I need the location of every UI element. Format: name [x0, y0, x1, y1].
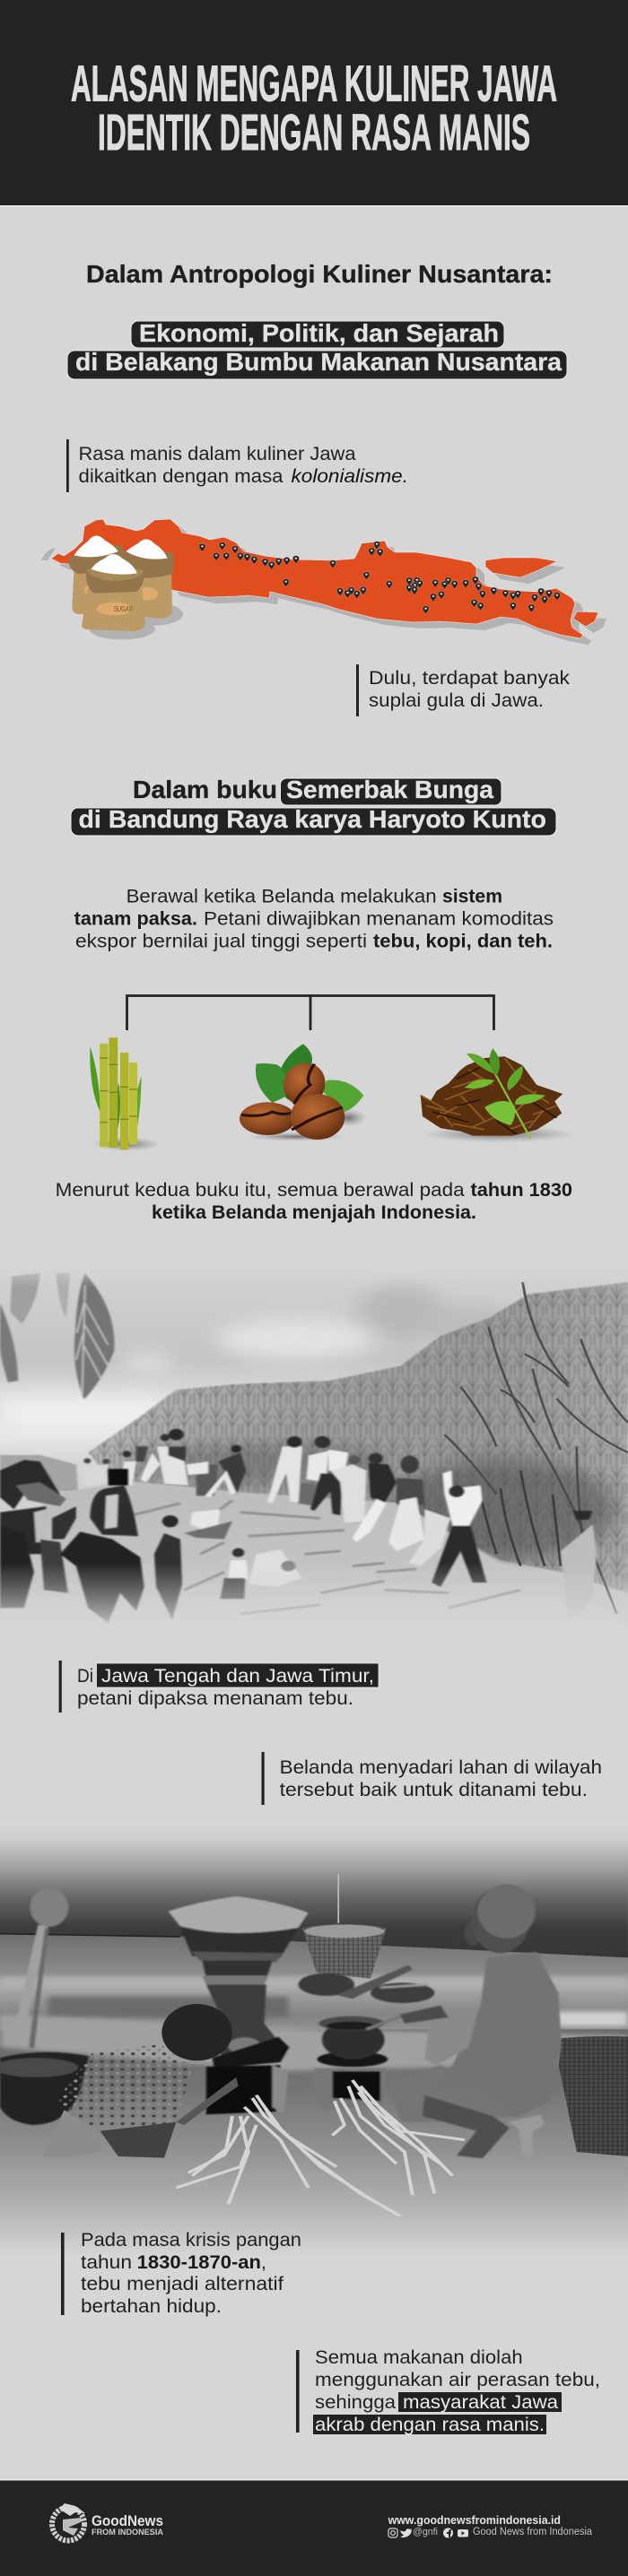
callout: lahan: tersebut baik untuk ditanami tebu.: [280, 1780, 588, 1800]
callout: kolonialisme: dikaitkan dengan masa: [79, 466, 283, 487]
text block: tahun 1830: ketika Belanda menjajah Indonesia.: [152, 1202, 476, 1223]
logo: GoodNews from Indonesia: GoodNews: [92, 2512, 163, 2529]
icon: sugar sacks: [69, 535, 183, 639]
text block: tahun 1830: Menurut kedua buku itu, semua berawal pada: [56, 1180, 465, 1201]
text block: tahun 1830: tahun 1830: [470, 1180, 572, 1201]
distant hills: [0, 1455, 78, 1491]
callout: air perasan tebu: sehingga: [315, 2392, 396, 2413]
small stove and pot: [312, 2016, 403, 2110]
highlight: rasa manis: akrab dengan rasa manis.: [315, 2415, 545, 2435]
callout: krisis pangan: tahun: [81, 2252, 132, 2273]
photo fades: [0, 1255, 628, 1288]
child: [42, 2004, 239, 2158]
ledge: [0, 1934, 628, 2042]
highlight: masyarakat jawa: masyarakat Jawa: [403, 2392, 558, 2413]
wall: [0, 1823, 628, 1964]
island shapes: [51, 519, 598, 638]
callout: air perasan tebu: [296, 2347, 600, 2435]
main stove: [168, 1896, 309, 2114]
callout: krisis pangan: ,: [261, 2252, 266, 2273]
logo: GoodNews from Indonesia: FROM INDONESIA: [92, 2528, 163, 2537]
icon: youtube: [458, 2529, 468, 2537]
callout: air perasan tebu: menggunakan air perasan tebu,: [315, 2370, 600, 2390]
icon: twitter: [400, 2528, 412, 2537]
footer contact line: [388, 2513, 593, 2537]
text block: tahun 1830: [56, 1180, 572, 1223]
darker cane base: [124, 1444, 616, 1560]
pill: bandung raya: di Bandung Raya karya Haryoto Kunto: [79, 805, 546, 833]
pill: ekonomi politik sejarah: Ekonomi, Politik, dan Sejarah: [139, 319, 499, 347]
floor: [0, 2029, 628, 2257]
callout: suplai gula: Dulu, terdapat banyak: [369, 668, 571, 689]
heading: antropologi: [67, 260, 567, 379]
photo: sugarcane plantation: [0, 1255, 628, 1644]
heading: semerbak bunga: Dalam buku: [133, 776, 277, 803]
icon: instagram: [388, 2528, 397, 2537]
footer: [0, 2479, 628, 2576]
callout: krisis pangan: Pada masa krisis pangan: [81, 2230, 301, 2251]
text block: sistem tanam paksa: Petani diwajibkan menanam komoditas: [204, 909, 554, 930]
sticks bundles: [176, 2080, 465, 2216]
palm fronds: [0, 1273, 114, 1400]
bowl, board and tray: [299, 1965, 434, 2003]
callout: kolonialisme: kolonialisme.: [291, 466, 408, 487]
logo: GoodNews from Indonesia: [52, 2503, 163, 2541]
wicker basket: [302, 1874, 387, 1979]
left water pot: [0, 2052, 89, 2125]
icon: facebook: [443, 2528, 453, 2537]
cane field: [88, 1282, 628, 1593]
text block: sistem tanam paksa: tebu, kopi, dan teh.: [373, 932, 553, 952]
icon: sugarcane: [90, 1037, 161, 1151]
callout: jawa tengah: [59, 1661, 379, 1713]
callout: lahan: [262, 1752, 602, 1805]
callout: lahan: Belanda menyadari lahan di wilayah: [280, 1757, 602, 1778]
gourd ladle: [12, 1888, 68, 2049]
callout: krisis pangan: 1830-1870-an: [137, 2252, 261, 2273]
field ground: [0, 1481, 628, 1644]
sack label: SUGAR: [114, 605, 133, 613]
callout: suplai gula: suplai gula di Jawa.: [369, 690, 544, 711]
sky: [0, 1255, 628, 1641]
heading: antropologi: Dalam Antropologi Kuliner Nusantara:: [86, 260, 553, 288]
title: [71, 56, 557, 161]
ground straw texture: [132, 1500, 520, 1614]
footer contact line: Good News from Indonesia: [473, 2527, 593, 2537]
text block: sistem tanam paksa: ekspor bernilai jual tinggi seperti: [75, 932, 367, 952]
field workers: [83, 1429, 597, 1623]
pill: bumbu makanan: di Belakang Bumbu Makanan Nusantara: [75, 348, 563, 376]
header banner: [0, 0, 628, 206]
callout: jawa tengah: Di: [77, 1666, 93, 1687]
right basket: [559, 2036, 628, 2156]
callout: krisis pangan: [61, 2230, 301, 2317]
callout: krisis pangan: tebu menjadi alternatif: [81, 2274, 283, 2294]
bracket connector: [127, 995, 493, 1030]
pill: semerbak bunga: Semerbak Bunga: [286, 776, 494, 803]
text block: sistem tanam paksa: tanam paksa.: [74, 909, 197, 930]
photo: Javanese women cooking: [0, 1823, 628, 2257]
heading: semerbak bunga: [71, 776, 556, 836]
footer contact line: www.goodnewsfromindonesia.id: [388, 2513, 561, 2527]
callout: suplai gula: [356, 664, 571, 716]
highlight: jawa tengah dan jawa timur: Jawa Tengah dan Jawa Timur,: [101, 1666, 374, 1687]
icon: tea leaves: [421, 1048, 577, 1142]
seated woman: [388, 1885, 562, 2158]
map of Java with sugar sacks: [41, 519, 606, 645]
callout: air perasan tebu: Semua makanan diolah: [315, 2347, 523, 2368]
callout: krisis pangan: bertahan hidup.: [81, 2296, 222, 2317]
text block: sistem tanam paksa: Berawal ketika Belanda melakukan: [126, 887, 437, 907]
text block: sistem tanam paksa: [74, 887, 554, 952]
footer contact line: @gnfi: [413, 2527, 438, 2537]
large cane leaves: [445, 1282, 628, 1614]
callout: jawa tengah: petani dipaksa menanam tebu.: [77, 1688, 353, 1709]
icon: coffee beans: [240, 1044, 366, 1141]
callout: kolonialisme: [66, 439, 408, 492]
location pins: [199, 542, 561, 614]
logo emblem: [52, 2503, 85, 2541]
text block: sistem tanam paksa: sistem: [442, 887, 502, 907]
callout: kolonialisme: Rasa manis dalam kuliner Jawa: [79, 444, 356, 464]
map shadow: [59, 525, 606, 645]
overseer, cart and horses: [0, 1460, 182, 1623]
